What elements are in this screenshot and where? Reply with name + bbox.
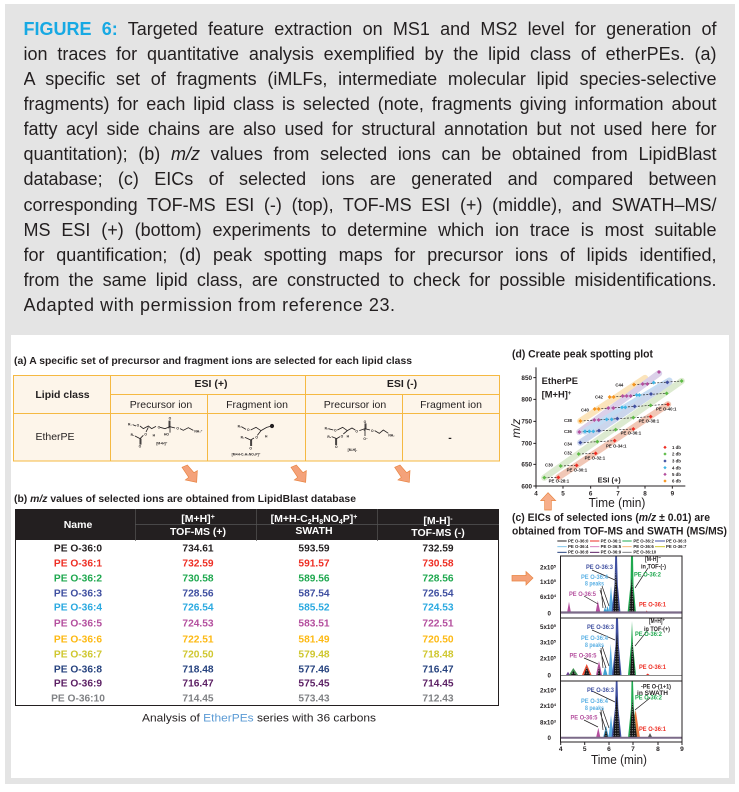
figure panel background [11,335,729,778]
trend bands [544,373,682,478]
x tick labels: 5 [561,491,565,498]
peak labels: PE O-36:2 [634,572,661,578]
structure: precursor M-H: O⁻ [363,437,368,441]
table b rows: 714.45 [182,694,214,704]
axes [533,367,685,489]
y ticks: 5 [554,638,557,644]
heading c [512,512,727,538]
structure: precursor M-H: O [334,429,337,433]
peak labels: -PE O-(1+1) [641,684,671,690]
x tick labels [534,491,675,498]
y ticks: 0 [548,672,552,680]
table b rows: 575.45 [298,678,330,690]
table b header [15,509,499,541]
peak labels: PE O-36:5 [570,714,598,722]
EIC legend: PE O-36:1 [601,538,622,543]
table a text: ESI (-) [387,378,417,390]
species labels: PE O-32:1 [585,456,606,461]
peak labels: in TOF-(+) [644,626,670,633]
heading d: (d) Create peak spotting plot [512,348,653,360]
peak labels: PE O-36:1 [639,602,666,608]
structure: precursor M+H [128,417,203,449]
structure: precursor M-H: NH₂ [388,434,395,438]
table b header: SWATH [295,525,333,537]
EIC panel 1 [540,556,682,618]
peak spotting chart [509,367,685,510]
EIC legend: PE O-36:9 [601,550,622,555]
caption text: from the same lipid class, are constructed to check for possible misidentifications. [24,270,716,290]
y ticks: 4 [554,702,557,707]
peak labels: PE O-36:2 [635,694,662,702]
x tick labels: 6 [607,746,611,753]
structure: fragment ion: R₂ [241,435,245,439]
structure: precursor M+H: R₁ [128,422,132,426]
leader lines [584,568,648,608]
peak labels: PE O-36:4 [581,698,608,705]
table b rows: PE O-36:8 [54,664,102,676]
peaks [561,681,682,738]
legend: 3 db [672,459,681,464]
y ticks: 0 [548,735,552,742]
table b header: 8 [319,519,323,526]
species labels: PE O-38:1 [639,419,660,424]
structure: precursor M-H [325,420,395,452]
section d: peak spotting plot [509,348,685,510]
table b rows: 716.47 [422,664,454,676]
section b: m/z table [14,494,499,724]
peaks [561,556,682,613]
table b rows: 728.56 [422,574,454,584]
y ticks: 5 [554,623,557,628]
right arrow [512,572,533,585]
legend: 6 db [672,479,681,484]
x tick labels: 4 [559,746,563,753]
table b rows: PE O-36:7 [54,650,102,660]
species labels: PE O-36:1 [621,431,642,436]
section a: lipid class table [14,356,500,482]
carbon labels: C40 [581,408,590,413]
peak labels [569,556,666,608]
structure: precursor M+H: O [158,426,161,430]
caption text: fatty acyl side chains are also used for structural annotation but not used here for [24,119,716,139]
peak labels: PE O-36:1 [639,726,666,733]
up arrow [541,493,556,510]
table b rows: 728.56 [182,588,214,600]
table b rows: 732.59 [182,558,214,570]
peak labels: PE O-36:4 [581,574,608,581]
legend [663,445,681,484]
EIC panel 2 [540,618,682,681]
table b rows: 583.51 [298,618,330,630]
structure: fragment ion: H [265,435,268,439]
y ticks: 5 [554,564,557,568]
x tick labels: 9 [671,491,675,498]
table a text: Precursor ion [130,399,192,411]
table b rows: 716.47 [182,678,214,690]
structure: precursor M-H: O [364,420,367,424]
EIC legend: PE O-36:3 [666,538,687,543]
peak labels: PE O-36:5 [570,652,597,660]
structure: precursor M+H: O [169,417,172,421]
carbon labels: C30 [545,463,554,468]
carbon labels: C44 [615,383,624,388]
EIC legend: PE O-36:2 [633,538,654,543]
y ticks: 5x10 [540,624,554,631]
structure: precursor M-H: O [341,434,344,438]
y ticks: 5 [554,654,557,660]
y tick labels: 700 [521,441,532,448]
mode label: ESI (+) [598,476,621,485]
x tick labels: 8 [656,746,660,753]
structure: precursor M+H: R₂ [131,433,135,437]
y ticks: 3x10 [540,640,554,646]
x tick labels: 8 [643,491,647,498]
structure: precursor M+H: [M+H]⁺ [156,441,168,445]
leader lines [584,630,648,668]
table b header: 2 [308,519,312,526]
EIC legend: PE O-36:0 [568,538,589,543]
peak labels [570,684,671,733]
structure: precursor M+H: O [137,424,140,428]
table b rows: PE O-36:6 [54,634,102,646]
table b header: H [312,513,319,525]
caption text: Adapted with permission from reference 23. [24,295,396,315]
species labels: PE O-30:1 [567,468,588,473]
table b header: [M+H-C [271,513,308,525]
EIC legend: PE O-36:6 [633,544,654,549]
table a text: EtherPE [35,431,75,443]
legend: 4 db [672,465,681,470]
structure: precursor M-H: [M-H]- [348,448,357,452]
table b header: NO [323,513,339,525]
table b rows: PE O-36:0 [54,544,102,554]
table b rows: 720.50 [182,650,214,660]
structure: fragment ion: O [249,446,252,450]
table b header: TOF-MS (+) [170,526,226,538]
caption text: A specific set of fragments (iMLFs, intermediate molecular lipid species-selective [24,69,716,89]
y ticks: 8x10 [540,720,554,726]
panel frame [560,681,682,742]
caption text: for quantification; (d) peak spotting maps for precursor ions of lipids identified, [24,245,716,265]
x ticks [561,742,682,745]
table a text [35,378,482,444]
y tick labels: 750 [521,419,532,426]
data points 3 db [578,380,669,445]
section c: EICs [512,512,727,767]
table b rows: 734.61 [182,544,214,554]
y axis title: m/z [509,419,523,438]
table b rows: 722.51 [422,618,454,630]
table b rows: 577.46 [298,664,330,676]
table a text: ESI (+) [195,378,227,390]
table b rows: PE O-36:10 [51,694,105,704]
species labels [549,407,677,484]
y tick labels: 600 [521,483,532,490]
legend: 1 db [672,445,681,450]
heading a: (a) A specific set of precursor and fragment ions are selected for each lipid class [14,356,412,367]
y ticks: 2x10 [540,688,554,694]
structure: precursor M-H: O [335,445,338,449]
table b header: 4 [339,519,343,526]
table b rows: 732.59 [422,544,454,554]
peak labels: PE O-36:4 [581,635,608,642]
table b rows: PE O-36:2 [54,574,102,584]
carbon labels: C34 [564,442,573,447]
table a text: Precursor ion [324,399,386,411]
carbon labels: C32 [564,451,573,456]
table a text: Lipid class [35,389,90,401]
structure: fragment ion: R₁ [238,425,242,429]
y tick labels [521,375,532,490]
data points 4 db [583,381,656,433]
carbon labels [545,383,624,468]
leader lines [584,691,650,730]
peak labels: [M+H]⁺ [649,618,665,625]
EIC legend: PE O-36:8 [568,550,589,555]
structure: fragment ion [232,424,274,456]
heading c: obtained from TOF-MS and SWATH (MS/MS) [512,526,727,538]
table b rows: 589.56 [298,574,330,584]
caption text: FIGURE 6: Targeted feature extraction on MS1 and MS2 level for generation of [24,19,716,39]
x tick labels: 7 [616,491,620,498]
data points 1 db [556,402,670,479]
y ticks: 4 [554,686,557,692]
structure: precursor M+H: H [153,434,156,438]
table b rows: 724.53 [422,602,454,614]
table b rows: 722.51 [182,634,214,646]
table b footnote: Analysis of EtherPEs series with 36 carbons [142,712,376,724]
table b rows: 573.43 [298,694,330,704]
structure: precursor M-H: H [347,434,350,438]
table a grid [14,376,500,461]
y ticks: 1x10 [540,579,554,586]
carbon labels: C42 [595,395,604,400]
peak labels: PE O-36:1 [639,664,666,671]
molecule structures [128,417,395,456]
x tick labels: 7 [631,746,635,753]
x axis title: Time (min) [591,753,647,767]
peak labels: PE O-36:5 [569,591,596,598]
structure: precursor M-H: R₁ [325,426,329,430]
peak labels: PE O-36:2 [635,631,662,638]
table b header: TOF-MS (-) [411,527,465,539]
structure: precursor M+H: NH₃⁺ [194,429,203,433]
table a text: - [448,432,452,444]
data points 5 db [577,370,661,434]
peak labels: PE O-36:3 [587,624,614,631]
caption text: corresponding TOF-MS ESI (-) (top), TOF-MS ESI (+) (middle), and SWATH–MS/ [24,195,716,215]
species labels: PE O-40:1 [656,407,677,412]
species labels: PE O-34:1 [606,444,627,449]
peak labels: 8 peaks [585,705,604,712]
carbon labels: C36 [564,429,573,434]
EIC legend: PE O-36:4 [568,544,589,549]
y ticks [540,623,557,680]
class label: EtherPE [542,376,578,386]
y ticks: 0 [548,610,552,618]
arrows from table a to table b [182,465,410,482]
structure: precursor M+H: HO [164,433,169,437]
adduct label: [M+H] [542,390,568,400]
heading c: (c) EICs of selected ions (m/z ± 0.01) are [512,512,710,524]
table b rows: PE O-36:3 [54,588,102,600]
EIC legend: PE O-36:5 [601,544,622,549]
table b rows: 720.50 [422,634,454,646]
table b rows: PE O-36:5 [54,618,102,630]
data points 6 db [578,383,636,423]
peak labels: in TOF-(-) [641,564,666,570]
y ticks: 4 [554,593,557,598]
x tick labels: 4 [534,491,538,498]
table b rows: 712.43 [422,694,454,704]
table b rows: 591.57 [298,558,330,570]
table b header: [M+H] [181,513,211,525]
peaks [561,618,682,676]
y ticks [540,686,557,742]
table b header: - [450,516,453,523]
EIC legend: PE O-36:7 [666,544,687,549]
table b header: P] [343,513,353,525]
y ticks: 6x10 [540,594,554,601]
structure: precursor M+H: O [176,426,179,430]
structure: precursor M+H: O [139,445,142,449]
heading b: (b) m/z values of selected ions are obtained from LipidBlast database [14,494,356,505]
peak labels: 8 peaks [585,642,604,649]
table b rows: 718.48 [182,664,214,676]
panel frame [560,618,682,681]
EIC legend: PE O-36:10 [633,550,657,555]
x tick labels: 5 [583,746,587,753]
table a text: Fragment ion [420,399,482,411]
table b header: Name [64,519,92,531]
EIC panel 3 [540,681,682,745]
x axis title: Time (min) [589,496,645,510]
table b header: + [211,514,215,521]
caption text: fragments) for each lipid class is selected (note, fragments giving information about [24,94,716,114]
caption text: database; (c) EICs of selected ions are generated and compared between [24,169,716,189]
y ticks: 3 [554,718,557,724]
table b rows: 585.52 [298,602,330,614]
carbon labels: C38 [564,418,573,423]
carbon series dashed lines [544,381,682,478]
y tick labels: 800 [521,397,532,404]
table b rows: 730.58 [422,558,454,570]
table b rows: 714.45 [422,678,454,690]
table b frame [15,540,499,706]
table b rows: 730.58 [182,574,214,584]
peak labels: [M-H]⁻ [645,556,661,563]
EIC legend [557,538,687,555]
table b rows [51,544,454,704]
table b rows: 718.48 [422,650,454,660]
table b rows: 581.49 [298,634,330,646]
table b rows: 579.48 [298,650,330,660]
y tick labels: 650 [521,462,532,469]
table b rows: 726.54 [182,602,214,614]
table b rows: 726.54 [422,588,454,600]
structure: fragment ion: O [255,436,258,440]
structure: precursor M-H: P [364,428,367,432]
table b header: [M-H] [423,515,450,527]
caption text: quantitation); (b) m/z values from selected ions can be obtained from LipidBlast [24,144,716,164]
table a text: Fragment ion [226,399,288,411]
structure: fragment ion: O [247,428,250,432]
y ticks: 5 [554,578,557,583]
y ticks [540,564,557,618]
caption text: MS ESI (+) (bottom) experiments to determine which ion trace is most suitable [24,220,716,240]
structure: precursor M-H: O [371,429,374,433]
x tick labels: 6 [589,491,593,498]
caption text [24,19,717,315]
peak labels [570,618,670,671]
peak labels: PE O-36:3 [586,564,613,571]
structure: precursor M+H: P [168,426,171,430]
legend: 5 db [672,472,681,477]
peak labels: 8 peaks [585,580,604,588]
caption text: ion traces for quantitative analysis exemplified by the lipid class of etherPEs. (a) [24,44,716,64]
structure: precursor M+H: O [144,432,147,436]
species labels: PE O-28:1 [549,479,570,484]
structure: precursor M-H: O [355,429,358,433]
x tick labels [559,746,684,753]
table b header: + [353,514,357,521]
table b rows: PE O-36:9 [54,678,102,690]
adduct label: + [568,391,572,397]
table b rows: 587.54 [298,588,330,600]
legend: 2 db [672,452,681,457]
x tick labels: 9 [680,746,684,753]
structure: precursor M-H: R₂ [327,435,332,439]
peak labels: PE O-36:3 [587,687,614,694]
table b rows: PE O-36:1 [54,558,102,570]
peak labels: in SWATH [637,690,668,697]
data points 2 db [542,379,684,480]
y ticks: 2x10 [540,703,554,710]
panel frame [560,556,682,618]
y ticks: 2x10 [540,564,554,572]
table b rows: 724.53 [182,618,214,630]
y ticks: 2x10 [540,656,554,662]
table b rows: PE O-36:4 [54,602,102,614]
y tick labels: 850 [521,375,532,382]
table b rows: 593.59 [298,544,330,554]
structure: fragment ion: [M+H-C₂H₈NO₄P]⁺ [232,452,261,456]
